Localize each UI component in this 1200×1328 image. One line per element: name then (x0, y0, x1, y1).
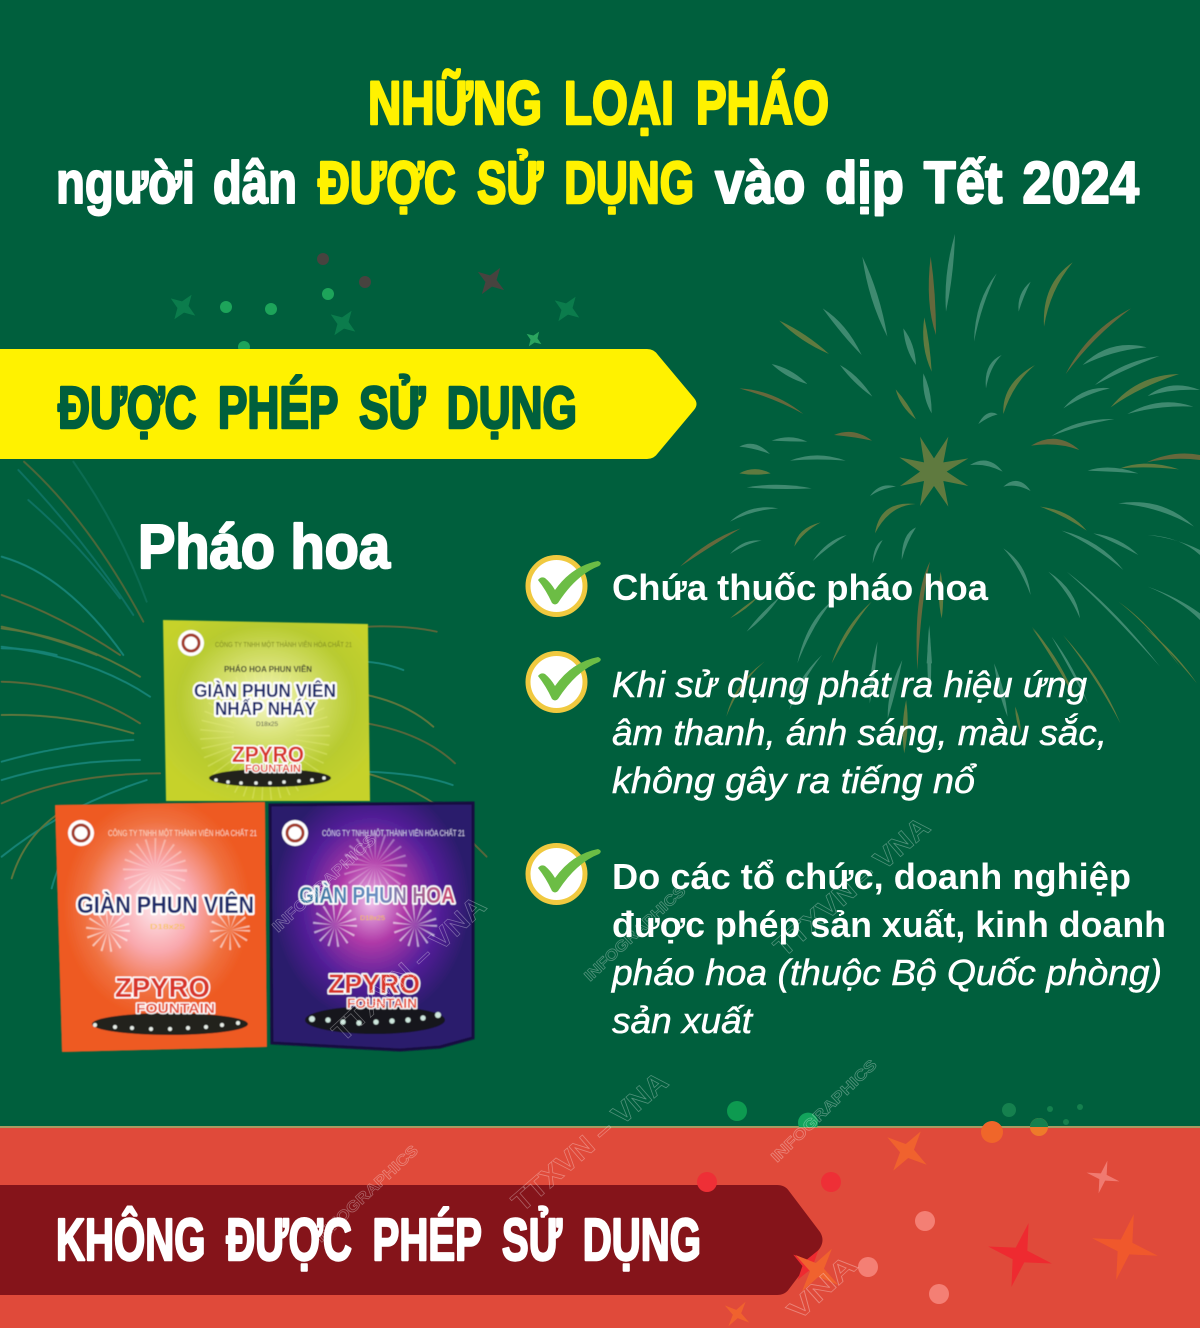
text: producers description: Do các tổ chức, doanh nghiệp (612, 856, 1131, 897)
text: effects description: âm thanh, ánh sáng, màu sắc, (612, 712, 1107, 753)
watermark: TTXVN VNA infographics: INFOGRAPHICS (581, 882, 689, 985)
bullet 1 (528, 558, 989, 614)
text: producers description: được phép sản xuất, kinh doanh (612, 904, 1166, 945)
text: producers description (611, 856, 1166, 1041)
box: orange Giàn phun viên: ZPYRO (115, 972, 210, 1003)
watermark: TTXVN VNA infographics (269, 811, 936, 1326)
box: green Giàn phun viên nhấp nháy: NHẤP NHÁY (215, 698, 316, 719)
banner heading: ĐƯỢC PHÉP SỬ DỤNG (58, 374, 577, 441)
box: green Giàn phun viên nhấp nháy: FOUNTAIN (245, 763, 301, 775)
decoration: top stars and dots (162, 253, 588, 353)
box: purple Giàn phun hoa: GIÀN PHUN HOA (299, 881, 455, 908)
bullet 3 (528, 846, 1166, 1041)
decoration: red section stars and dots (716, 1118, 1167, 1328)
watermark: TTXVN VNA infographics: TTXVN – VNA (326, 890, 492, 1047)
background: red section (0, 1127, 1200, 1328)
box: green Giàn phun viên nhấp nháy (163, 620, 370, 801)
watermark: TTXVN VNA infographics: INFOGRAPHICS (768, 1056, 880, 1166)
title line 2: được sử dụng: ĐƯỢC SỬ DỤNG (318, 149, 694, 216)
yellow banner: allowed (0, 349, 696, 459)
banner heading: KHÔNG ĐƯỢC PHÉP SỬ DỤNG (56, 1206, 701, 1273)
watermark: TTXVN VNA infographics: INFOGRAPHICS (269, 831, 379, 936)
box: orange Giàn phun viên: CÔNG TY TNHH MỘT THÀNH VIÊN HÓA CHẤT 21 (108, 828, 257, 838)
text: chứa thuốc pháo hoa: Chứa thuốc pháo hoa (612, 567, 989, 608)
box: orange Giàn phun viên: D18x25 (150, 924, 185, 931)
box: purple Giàn phun hoa: FOUNTAIN (347, 996, 417, 1011)
text: effects description: không gây ra tiếng nổ (612, 760, 977, 801)
title line 1: NHỮNG LOẠI PHÁO (368, 69, 829, 137)
title line 2: vào dịp Tết 2024: vào dịp Tết 2024 (715, 150, 1139, 216)
product boxes (55, 620, 473, 1052)
box: green Giàn phun viên nhấp nháy: D18x25 (256, 721, 278, 728)
dark red banner: not allowed (0, 1172, 853, 1306)
section boundary line (0, 1126, 1200, 1128)
box: green Giàn phun viên nhấp nháy: GIÀN PHUN VIÊN (194, 680, 336, 701)
heading: Pháo hoa: Pháo hoa (138, 513, 390, 582)
text: effects description (612, 664, 1107, 801)
title (56, 69, 1139, 216)
box: orange Giàn phun viên (55, 802, 267, 1052)
watermark: TTXVN VNA infographics: INFOGRAPHICS (312, 1142, 422, 1246)
decoration: boundary dots (727, 1101, 1083, 1143)
box: purple Giàn phun hoa: D18x25 (360, 915, 385, 922)
box: purple Giàn phun hoa: CÔNG TY TNHH MỘT THÀNH VIÊN HÓA CHẤT 21 (322, 828, 465, 838)
icon: check mark (528, 654, 601, 710)
watermark: TTXVN VNA infographics: TTXVN – VNA (768, 811, 936, 963)
watermark: TTXVN VNA infographics: TTXVN – VNA (506, 1066, 674, 1218)
text: producers description: sản xuất (612, 1000, 754, 1041)
box: purple Giàn phun hoa (270, 803, 473, 1050)
decoration: right firework burst (680, 234, 1200, 753)
box: orange Giàn phun viên: FOUNTAIN (136, 1000, 215, 1016)
text: effects description: Khi sử dụng phát ra hiệu ứng (612, 664, 1087, 705)
icon: check mark (528, 846, 601, 902)
bullet 2 (528, 654, 1107, 801)
icon: check mark (528, 558, 601, 614)
text: producers description: pháo hoa (thuộc Bộ Quốc phòng) (611, 952, 1162, 993)
box: orange Giàn phun viên: GIÀN PHUN VIÊN (77, 891, 254, 919)
box: green Giàn phun viên nhấp nháy: PHÁO HOA PHUN VIÊN (224, 665, 312, 674)
decoration: left firework lines (2, 462, 487, 888)
box: green Giàn phun viên nhấp nháy: CÔNG TY TNHH MỘT THÀNH VIÊN HÓA CHẤT 21 (215, 639, 352, 649)
box: green Giàn phun viên nhấp nháy: ZPYRO (232, 742, 304, 767)
box: purple Giàn phun hoa: ZPYRO (328, 969, 420, 999)
title line 2: người dân: người dân (56, 150, 297, 216)
watermark: TTXVN VNA infographics: VNA (781, 1249, 863, 1326)
